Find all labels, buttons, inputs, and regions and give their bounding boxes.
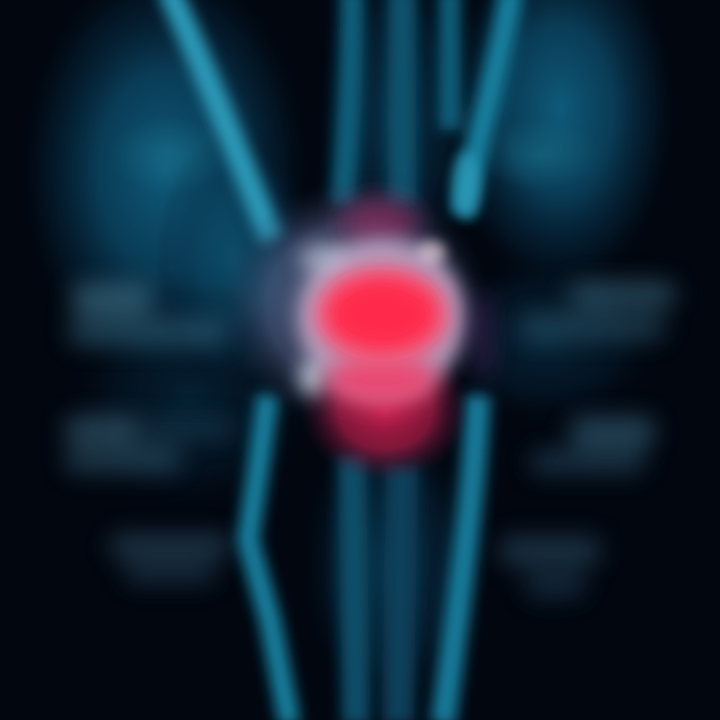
upper inflamed glow	[340, 198, 420, 246]
red core	[328, 278, 436, 350]
text block: right middle	[530, 416, 655, 474]
right thigh edge glow	[452, 151, 480, 219]
lower leg bones and vessels	[248, 395, 478, 720]
text block: right upper	[520, 281, 675, 340]
pale highlight left	[298, 360, 326, 396]
pink halo	[314, 265, 450, 365]
pale highlight upper right	[418, 240, 446, 264]
heading placeholder left	[110, 117, 230, 193]
knee joint	[220, 180, 494, 482]
text block: left lower	[110, 533, 230, 584]
pink lower band	[326, 354, 438, 406]
upper leg bones and vessels	[168, 0, 512, 240]
heading placeholder right	[478, 119, 602, 191]
joint haze	[220, 180, 490, 430]
text block: left middle	[65, 416, 235, 473]
right magenta edge	[470, 290, 494, 380]
pale highlight upper left	[298, 242, 346, 274]
lower inflamed glow	[300, 338, 470, 482]
text block: left upper	[68, 283, 228, 346]
bright joint ring	[298, 238, 466, 398]
text block: right lower	[500, 536, 600, 598]
